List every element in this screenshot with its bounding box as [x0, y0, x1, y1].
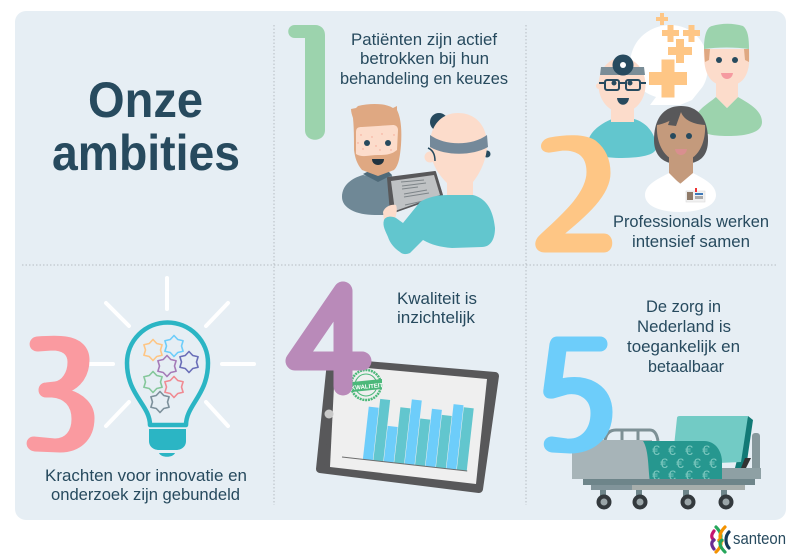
- title: Onze: [88, 72, 203, 128]
- illustration: tablet held: [388, 172, 442, 213]
- logo: santeon: [712, 527, 786, 552]
- illustration: hospital bed: [572, 416, 761, 510]
- euro symbols: €: [652, 467, 660, 483]
- stamp: KWALITEIT: [351, 383, 384, 392]
- illustration: bearded man: [342, 104, 401, 215]
- text: ambition 4: [397, 289, 477, 327]
- illustration: doctor: [587, 54, 656, 158]
- title: [52, 72, 240, 181]
- text: ambition 2: [613, 212, 769, 251]
- speech bubble: [630, 25, 708, 105]
- euro symbols: €: [702, 467, 710, 483]
- euro symbols: €: [668, 467, 676, 483]
- number 3: [28, 337, 93, 451]
- euro symbols: €: [709, 455, 717, 471]
- icon: medical crosses: [649, 13, 700, 98]
- text: ambition 1: behandeling en keuzes: [340, 69, 508, 88]
- number 4: [295, 291, 362, 386]
- text: ambition 5: toegankelijk en: [627, 337, 740, 356]
- text: ambition 3: Krachten voor innovatie en: [45, 466, 247, 485]
- text: ambition 3: [45, 466, 247, 504]
- euro symbols: €: [685, 442, 693, 458]
- icon: santeon mark: [712, 527, 729, 552]
- stamp: [351, 370, 384, 400]
- bar chart: [342, 392, 474, 471]
- panel: ambition 2: [537, 13, 769, 251]
- euro symbols: €: [702, 442, 710, 458]
- euro symbols: €: [660, 455, 668, 471]
- euro symbols: €: [668, 442, 676, 458]
- text: ambition 5: betaalbaar: [648, 357, 724, 376]
- text: ambition 1: [340, 30, 508, 88]
- illustration: patient: [383, 113, 495, 254]
- number 2: [537, 137, 611, 251]
- text: ambition 1: betrokken bij hun: [360, 49, 489, 68]
- panel: ambition 5: [545, 297, 761, 510]
- icon: light bulb: [127, 322, 208, 457]
- illustration: tablet: [320, 362, 495, 489]
- text: ambition 3: onderzoek zijn gebundeld: [51, 485, 240, 504]
- illustration: nurse: [645, 106, 716, 212]
- text: ambition 5: Nederland is: [637, 317, 731, 336]
- euro symbols: €: [685, 467, 693, 483]
- text: ambition 2: intensief samen: [632, 232, 750, 251]
- title: ambities: [52, 125, 240, 181]
- euro symbols: [652, 442, 717, 483]
- panel: ambition 4: [295, 289, 495, 489]
- text: ambition 1: Patiënten zijn actief: [351, 30, 497, 49]
- text: ambition 4: inzichtelijk: [397, 308, 475, 327]
- euro symbols: €: [652, 442, 660, 458]
- number 5: [545, 338, 611, 452]
- gears: [144, 336, 198, 412]
- text: ambition 4: Kwaliteit is: [397, 289, 477, 308]
- number 1: [288, 25, 325, 140]
- panel: ambition 3: [28, 278, 254, 504]
- panel: ambition 1: [288, 25, 508, 254]
- text: ambition 5: De zorg in: [646, 297, 721, 316]
- text: ambition 5: [627, 297, 740, 376]
- euro symbols: €: [693, 455, 701, 471]
- illustration: surgeon: [695, 24, 762, 136]
- light rays: [88, 278, 254, 426]
- euro symbols: €: [676, 455, 684, 471]
- wordmark: santeon: [733, 529, 786, 548]
- text: ambition 2: Professionals werken: [613, 212, 769, 231]
